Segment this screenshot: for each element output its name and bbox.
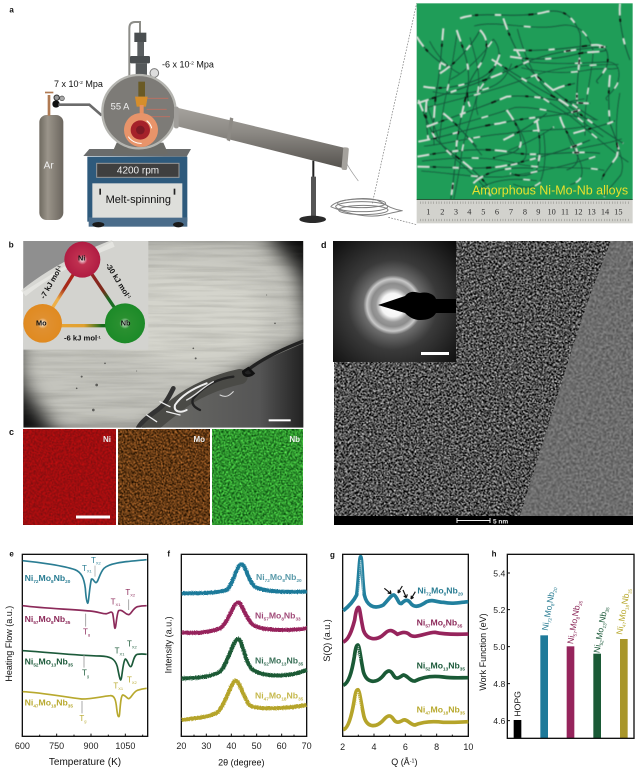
panel label b: b (9, 240, 14, 250)
sample labels: 20 (65, 579, 71, 584)
y axis title: Intensity (a.u.) (163, 616, 173, 673)
sample labels: 35 (298, 696, 304, 701)
sample labels: 18 (443, 710, 449, 715)
sample labels: Ni (25, 614, 33, 624)
bar labels: 20 (552, 587, 558, 593)
sample labels: 35 (65, 620, 71, 625)
sample labels: Nb (446, 585, 458, 595)
bar labels: Ni (614, 626, 625, 635)
x axis title: ) (414, 757, 417, 767)
transition temperature annotations: T (82, 564, 87, 573)
bar labels: Nb (597, 611, 609, 624)
sample labels: 47 (264, 696, 269, 701)
ruler: 13 (588, 207, 596, 216)
bar labels: Nb (570, 604, 582, 617)
amorphous region (334, 241, 611, 516)
transition temperature annotations: X2 (132, 680, 138, 685)
x axis ticks and labels: 60 (277, 741, 287, 751)
transition temperature annotations: T (91, 556, 96, 565)
transition temperature annotations: g (84, 719, 86, 724)
map Mo (118, 429, 210, 525)
map Nb: Nb (289, 435, 300, 444)
sample labels: 35 (457, 624, 463, 629)
ruler: 10 (548, 207, 556, 216)
map Ni (23, 429, 116, 525)
sample labels: Ni (25, 698, 33, 708)
sample labels: Mo (431, 704, 443, 714)
sample labels: Nb (287, 655, 298, 665)
sample labels (255, 572, 304, 701)
sample labels: 18 (51, 704, 57, 709)
sample labels: 57 (33, 620, 39, 625)
x axis ticks and labels (15, 734, 143, 751)
y axis title: Heating Flow (a.u.) (4, 606, 14, 682)
sample labels: Mo (269, 610, 281, 620)
transition temperature annotations: X2 (130, 593, 136, 598)
sample labels: 8 (281, 616, 284, 621)
enthalpy Mo-Nb: -6 kJ mol (64, 334, 97, 343)
sample labels: Mo (431, 660, 443, 670)
panel c: EDS elemental maps (9, 427, 303, 525)
sample labels: Ni (417, 660, 425, 670)
bar labels: 8 (575, 616, 581, 620)
bar labels: Mo (542, 604, 554, 618)
TEM background (334, 241, 633, 525)
sample labels: Ni (25, 573, 33, 583)
pressure label chamber: -6 x 10 (162, 59, 189, 69)
sample labels: Ni (25, 656, 33, 666)
sample labels: 13 (443, 666, 449, 671)
x axis ticks and labels: 4 (371, 742, 376, 752)
pressure label argon: 7 x 10 (54, 79, 78, 89)
transition temperature annotations: X1 (116, 602, 121, 607)
node Ni: Ni (78, 254, 85, 263)
panel f: XRD patterns (163, 550, 312, 768)
transition temperature annotations: X1 (87, 569, 93, 574)
ruler: 4 (467, 207, 472, 216)
sample labels: 8 (51, 620, 54, 625)
zoom guide lines (372, 3, 417, 225)
x axis ticks and labels: 6 (403, 742, 408, 752)
sample labels (25, 573, 73, 709)
panel a: melt-spinning apparatus (9, 3, 417, 227)
sample labels: 8 (444, 591, 447, 596)
scale bar (269, 419, 291, 421)
control cabinet: 4200 rpm (117, 165, 159, 176)
sample labels: 8 (443, 624, 446, 629)
sample labels: Ni (255, 655, 264, 665)
transition temperature annotations: T (113, 681, 118, 690)
micrograph (23, 241, 304, 428)
x axis title: Q (Å (391, 757, 410, 767)
transition temperature annotations: T (127, 640, 132, 649)
tube with stand (176, 107, 358, 223)
transition temperature annotations: T (125, 588, 130, 597)
bar labels: 35 (605, 606, 610, 613)
x axis ticks and labels: 2 (340, 742, 345, 752)
bar labels: Mo (567, 618, 579, 632)
sample labels: Nb (285, 572, 296, 582)
sample labels: 20 (296, 578, 302, 583)
panel b: optical micrograph with mixing enthalpy inset (9, 228, 310, 435)
x axis title: 2θ (degree) (218, 758, 265, 768)
metallic ribbons (416, 4, 631, 199)
y axis ticks and labels: 5.2 (493, 605, 506, 615)
transition temperature annotations: T (82, 669, 87, 678)
panel label h: h (492, 549, 497, 558)
x axis ticks and labels: 30 (201, 741, 211, 751)
ruler: 11 (561, 207, 569, 216)
ruler: 15 (614, 207, 622, 216)
diffraction curves (182, 564, 307, 720)
bar labels: 35 (627, 588, 633, 594)
control cabinet (83, 149, 191, 227)
sample labels: 35 (68, 704, 73, 709)
diffraction inset (333, 241, 456, 362)
bar labels (513, 586, 633, 717)
sample labels: Nb (446, 618, 457, 628)
transition temperature annotations: T (115, 647, 120, 656)
x axis ticks and labels: 70 (302, 741, 312, 751)
transition temperature annotations: T (111, 597, 116, 606)
sample labels: Nb (54, 614, 65, 624)
transition temperature annotations: T (79, 714, 84, 723)
ruler: 6 (495, 207, 499, 216)
map Ni: Ni (103, 435, 111, 444)
sample labels: Mo (269, 655, 281, 665)
y axis title: Work Function (eV) (478, 613, 488, 691)
enthalpy Ni-Nb: -1 (126, 293, 133, 300)
bar labels: 52 (599, 639, 605, 646)
sample labels: 72 (265, 578, 270, 583)
sample labels: 8 (51, 579, 54, 584)
transition temperature annotations: g (88, 632, 90, 637)
sample labels: 47 (33, 704, 39, 709)
x axis ticks and labels: 750 (49, 741, 64, 751)
enthalpy Ni-Mo: -1 (55, 264, 62, 270)
sample labels (417, 585, 465, 715)
node Mo: Mo (36, 319, 47, 328)
ruler (417, 199, 633, 223)
panel label d: d (321, 240, 326, 250)
x axis ticks and labels: 600 (15, 741, 30, 751)
ruler: 14 (601, 207, 610, 216)
transition temperature annotations: T (127, 675, 132, 684)
x axis ticks and labels (340, 734, 473, 752)
bar labels: Mo (594, 627, 606, 641)
sample labels: 13 (281, 661, 287, 666)
curves (23, 560, 147, 717)
sample labels: 72 (33, 579, 39, 584)
ruler: 2 (440, 207, 444, 216)
bar labels: Mo (616, 608, 628, 622)
map Nb (212, 429, 303, 525)
bar labels: Nb (545, 591, 556, 604)
transition temperature annotations: X2 (96, 561, 102, 566)
map Mo: Mo (193, 435, 205, 444)
bar labels: Nb (619, 592, 631, 605)
x axis ticks and labels (176, 734, 312, 751)
control cabinet: Melt-spinning (106, 194, 171, 206)
bar labels: HOPG (513, 691, 523, 717)
sample labels: 18 (281, 696, 287, 701)
vacuum chamber (102, 22, 179, 154)
pressure label argon: -2 (78, 80, 83, 86)
sample labels: Nb (448, 704, 460, 714)
sample labels: Mo (431, 618, 443, 628)
sample labels: Mo (39, 573, 51, 583)
enthalpy Ni-Nb: -30 kJ mol (104, 261, 131, 298)
transition temperature annotations: X1 (118, 686, 124, 691)
scale strip: 5 nm (493, 518, 508, 526)
argon gas cylinder (39, 92, 102, 220)
sample labels: Ni (255, 690, 264, 700)
x axis title: Temperature (K) (49, 757, 121, 768)
y axis ticks and labels: 5.4 (493, 568, 506, 578)
x axis ticks and labels: 20 (176, 741, 186, 751)
transition temperature annotations: T (83, 627, 88, 636)
sample labels: 57 (264, 616, 269, 621)
sample labels: Nb (54, 573, 65, 583)
sample labels: Mo (431, 585, 444, 595)
bar labels: Ni (565, 635, 576, 645)
y axis ticks and labels: 5.0 (493, 642, 506, 652)
transition temperature annotations: X2 (132, 644, 138, 649)
x axis ticks and labels: 1050 (115, 741, 135, 751)
sample labels: 35 (460, 666, 465, 671)
x axis ticks and labels: 50 (252, 741, 262, 751)
vacuum chamber: 55 A (111, 101, 130, 111)
sample labels: Nb (448, 660, 460, 670)
structure factor curves (343, 557, 468, 730)
enthalpy Mo-Nb: -1 (97, 334, 102, 339)
green background (417, 3, 633, 200)
sample labels: Ni (255, 610, 264, 620)
y axis ticks and labels: 4.6 (493, 716, 506, 726)
x axis ticks and labels: 40 (226, 741, 236, 751)
panel label c: c (9, 427, 14, 437)
y axis ticks and labels (493, 568, 510, 726)
bar labels: 72 (547, 617, 553, 623)
sample labels: 72 (426, 591, 432, 596)
transition temperature annotations: X1 (120, 651, 125, 656)
photo: amorphous ribbons on green (417, 3, 640, 223)
enthalpy Ni-Mo: -7 kJ mol (38, 267, 63, 300)
pressure label argon: Mpa (83, 79, 103, 89)
axes frame (181, 554, 307, 736)
pressure label chamber: -2 (189, 60, 194, 66)
panel label f: f (167, 550, 170, 559)
coiled ribbons (331, 199, 403, 216)
sample labels: Nb (56, 698, 68, 708)
panel label a: a (9, 6, 14, 15)
panel d: TEM image with diffraction inset (321, 240, 633, 526)
bar labels: 35 (578, 600, 584, 606)
bar labels: 57 (572, 630, 578, 637)
panel label e: e (9, 550, 14, 559)
sample labels: 13 (51, 662, 57, 667)
transition temperature annotations: g (87, 673, 89, 678)
sample labels: 20 (458, 591, 463, 596)
pressure label chamber: Mpa (194, 59, 214, 69)
x axis ticks and labels: 900 (83, 741, 98, 751)
axes frame (343, 554, 468, 736)
sample labels: 33 (295, 616, 301, 621)
sample labels: 52 (33, 662, 39, 667)
x axis title: -1 (410, 758, 414, 764)
sample labels: 57 (425, 624, 431, 629)
bar labels: Ni (540, 622, 551, 631)
sample labels: 8 (282, 578, 285, 583)
sample labels: 35 (298, 661, 304, 666)
sample labels: Mo (39, 614, 51, 624)
scale strip (334, 516, 633, 526)
bar labels: 13 (602, 622, 608, 629)
sample labels: 35 (68, 662, 73, 667)
sample labels: Ni (417, 585, 426, 595)
bar labels: 18 (624, 604, 630, 610)
node Nb: Nb (121, 319, 131, 328)
y axis title: S(Q) (a.u.) (322, 619, 332, 662)
y axis ticks and labels: 4.8 (493, 679, 506, 689)
ruler: 5 (481, 207, 485, 216)
transition temperature annotations (79, 556, 138, 724)
ruler: 8 (523, 207, 527, 216)
sample labels: Ni (417, 704, 425, 714)
ruler: 12 (574, 207, 582, 216)
inset: ternary mixing enthalpy diagram (23, 241, 148, 350)
sample labels: Mo (269, 690, 281, 700)
axes frame (22, 554, 148, 736)
peak arrows (384, 586, 415, 599)
panel e: DSC curves (4, 550, 148, 768)
sample labels: Ni (256, 572, 265, 582)
panel g: structure factor (322, 551, 473, 767)
ruler: 1 (426, 207, 430, 216)
x axis ticks and labels: 10 (463, 742, 473, 752)
sample labels: Mo (270, 572, 282, 582)
ruler: 9 (536, 207, 540, 216)
sample labels: Nb (287, 690, 298, 700)
sample labels: 47 (425, 710, 431, 715)
sample labels: Nb (56, 656, 68, 666)
bar labels: 8 (550, 603, 556, 606)
bar labels: 47 (621, 621, 627, 627)
ruler: 3 (454, 207, 458, 216)
argon gas cylinder: Ar (44, 161, 54, 172)
sample labels: Mo (39, 656, 51, 666)
photo caption: Amorphous Ni-Mo-Nb alloys (472, 184, 628, 198)
bar labels: Ni (591, 644, 603, 654)
panel label g: g (330, 551, 335, 560)
sample labels: Nb (284, 610, 295, 620)
ruler: 7 (509, 207, 513, 216)
sample labels: 52 (264, 661, 269, 666)
sample labels: Ni (417, 618, 425, 628)
x axis ticks and labels: 8 (434, 742, 439, 752)
sample labels: Mo (39, 698, 51, 708)
sample labels: 52 (425, 666, 431, 671)
panel h: work function bar chart (478, 549, 634, 738)
bars (514, 635, 628, 738)
axes frame (507, 554, 634, 738)
sample labels: 35 (460, 710, 465, 715)
